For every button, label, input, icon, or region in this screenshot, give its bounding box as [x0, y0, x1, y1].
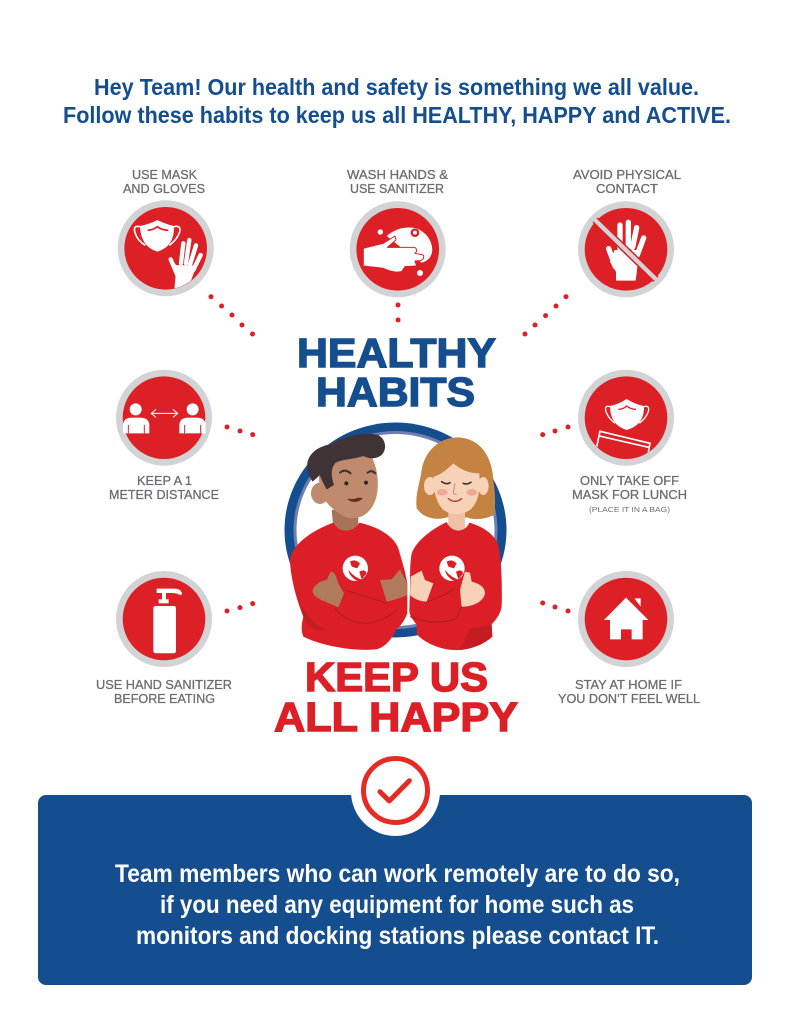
panel: remote work notice	[38, 747, 752, 985]
label: use mask and gloves	[123, 168, 205, 196]
icon: washing hands	[350, 201, 446, 297]
title	[63, 74, 731, 128]
panel text: Team members who can work remotely are to do so,	[115, 860, 680, 888]
label: use mask and gloves: USE MASK	[132, 168, 198, 182]
heading: keep us all happy: KEEP US	[305, 654, 488, 700]
habit: use mask and gloves	[118, 168, 214, 296]
habit: only take off mask for lunch	[572, 370, 687, 514]
icon: mask and glove	[118, 200, 214, 296]
heading: keep us all happy	[274, 654, 518, 740]
icon: house	[578, 571, 674, 667]
icon: check mark	[364, 758, 428, 822]
dotted connectors	[208, 294, 570, 614]
heading: keep us all happy: ALL HAPPY	[274, 694, 518, 740]
label: stay at home: YOU DON’T FEEL WELL	[558, 692, 700, 706]
ring backdrop	[284, 422, 506, 638]
icon: two people with distance arrow	[116, 370, 212, 466]
icon: mask and bag	[578, 370, 674, 466]
habit: avoid physical contact	[573, 168, 681, 297]
panel text: if you need any equipment for home such as	[160, 891, 634, 919]
habit: wash hands and use sanitizer	[347, 168, 449, 297]
label: keep a 1 meter distance: METER DISTANCE	[109, 488, 219, 502]
label: wash hands: WASH HANDS &	[347, 168, 449, 182]
man	[290, 434, 407, 650]
label: wash hands: USE SANITIZER	[350, 182, 444, 196]
label: keep a 1 meter distance	[109, 474, 219, 502]
label: use hand sanitizer before eating: BEFORE EATING	[114, 692, 215, 706]
icon: crossed hand	[578, 201, 674, 297]
label: avoid physical contact: AVOID PHYSICAL	[573, 168, 681, 182]
label: stay at home: STAY AT HOME IF	[575, 678, 682, 692]
woman	[409, 437, 502, 650]
title: Follow these habits to keep us all HEALTHY, HAPPY and ACTIVE.	[63, 102, 731, 128]
icon: sanitizer bottle	[116, 571, 212, 667]
title: Hey Team! Our health and safety is something we all value.	[94, 74, 699, 100]
heading: healthy habits: HEALTHY	[297, 330, 496, 376]
label: only take off mask for lunch	[572, 474, 687, 514]
label: stay at home	[558, 678, 700, 706]
habit: keep a 1 meter distance	[109, 370, 219, 502]
illustration: two team members	[284, 422, 506, 650]
label: keep a 1 meter distance: KEEP A 1	[137, 474, 192, 488]
label: only take off mask for lunch: MASK FOR LUNCH	[572, 488, 687, 502]
label: use mask and gloves: AND GLOVES	[123, 182, 205, 196]
label: avoid physical contact	[573, 168, 681, 196]
panel text: monitors and docking stations please contact IT.	[136, 922, 659, 950]
label: avoid physical contact: CONTACT	[596, 182, 658, 196]
heading: healthy habits: HABITS	[316, 369, 475, 415]
habit: use hand sanitizer before eating	[96, 571, 232, 706]
heading: healthy habits	[297, 330, 496, 415]
panel text	[115, 860, 680, 950]
label: use hand sanitizer before eating: USE HAND SANITIZER	[96, 678, 232, 692]
label: only take off mask for lunch: (PLACE IT IN A BAG)	[589, 505, 671, 514]
label: use hand sanitizer before eating	[96, 678, 232, 706]
label: only take off mask for lunch: ONLY TAKE OFF	[580, 474, 679, 488]
habit: stay at home	[558, 571, 700, 706]
label: wash hands	[347, 168, 449, 196]
notch behind check icon	[351, 747, 440, 836]
